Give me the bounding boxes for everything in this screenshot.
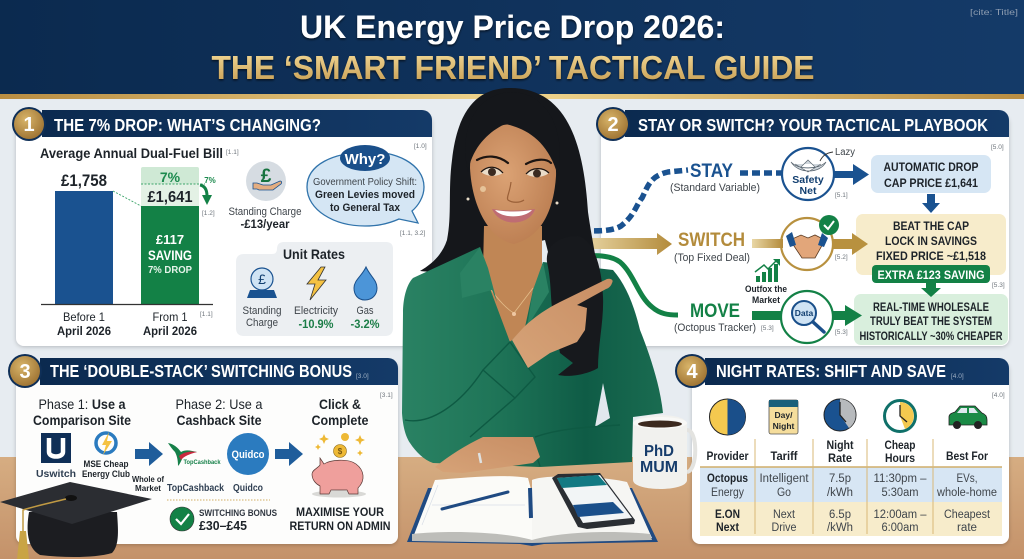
bar chart: annual bill [41,167,216,338]
smile [492,209,535,223]
box: real-time wholesale: REAL-TIME WHOLESALE [873,302,989,314]
table: night tariffs: E.ON [715,509,740,521]
unit rate labels: Charge [246,317,278,329]
cheek highlight and earrings [466,186,558,204]
icon: market chart [755,259,780,282]
neck and chest [483,226,542,342]
phase 2 heading: Cashback Site [176,412,262,428]
citations panel 2: [5.0] [991,144,1004,151]
pointing hand [512,279,613,368]
bar chart: annual bill: £1,641 [148,189,193,206]
icon: hand holding pound: £ [261,166,272,187]
icon: safety net [782,148,834,200]
stay label [670,161,760,194]
stay label: STAY [690,161,733,182]
table: night tariffs: 6:00am [882,522,918,534]
table: night tariffs: Next [773,509,796,521]
callout: why: Why? [345,151,385,168]
citation: title: [cite: Title] [970,8,1018,17]
citations panel 2: [5.1] [835,192,848,199]
table: night tariffs: Provider [706,451,749,463]
citations panel 1: [1.1] [226,149,239,156]
citations panel 3: [3.0] [356,373,369,380]
phase 1 heading: Phase 1: Use a [38,396,126,412]
table: night tariffs: rate [957,522,977,534]
icon: day night calendar: Day/ [775,410,793,420]
unit rate labels [242,305,380,331]
lazy note: Lazy [835,147,855,158]
citations panel 4: [4.0] [951,373,964,380]
icon: data magnifier: Data [795,308,813,318]
unit rate labels: -3.2% [350,319,380,331]
sleeve shading [405,342,620,466]
callout: why: Government Policy Shift: [313,177,417,188]
maximise message: MAXIMISE YOUR [296,507,385,519]
arrow: gold to fixed deal [832,233,868,255]
maximise message [290,507,390,533]
box: beat the cap: LOCK IN SAVINGS [885,236,977,248]
table: night tariffs: Energy [711,487,744,499]
table: night tariffs [700,439,1002,536]
logo: topcashback [167,443,224,494]
switch label: SWITCH [678,230,745,251]
icon: pound globe [247,268,277,298]
unit rates panel: Unit Rates [283,246,345,262]
citations panel 2: [5.3] [761,325,774,332]
citations panel 4 [951,373,1005,399]
icon: data magnifier [781,291,833,343]
table: night tariffs: EVs, [956,473,978,485]
arrow: data to move box [832,305,862,326]
box: beat the cap [856,214,1006,275]
table: night tariffs: Cheapest [944,509,991,521]
panel 2: playbook [596,107,1009,346]
table: night tariffs: 12:00am – [874,509,927,521]
logo: quidco: Quidco [233,483,263,494]
bar chart: annual bill: SAVING [148,247,192,263]
table: night tariffs: Go [777,487,791,499]
coffee mug: MUM [640,459,678,476]
box: automatic drop: CAP PRICE £1,641 [884,178,979,190]
switch label [674,230,750,264]
path: stay dashed [582,170,783,231]
citations panel 1: [1.1, 3.2] [400,230,425,237]
icon: day night clock [710,399,746,435]
table: night tariffs: Night [826,440,854,452]
citations panel 1: [1.0] [414,143,427,150]
title [212,9,814,86]
resting hand [435,437,540,473]
panel 2 flow [670,144,1008,345]
phase 2 heading [176,396,263,428]
icon: safety net: Safety [792,174,824,186]
badge 3 [8,354,42,388]
path: switch arrow [582,233,672,255]
icon: gas flame [354,267,377,300]
coffee mug: PhD [644,443,674,460]
graduation cap [0,482,152,559]
move label [674,301,756,334]
table: night tariffs: Tariff [770,451,798,463]
icon: piggy bank [312,433,366,498]
unit rates panel [236,242,393,336]
logo: topcashback: TopCashback [167,483,224,494]
smartphone [552,473,635,529]
phase 1 heading [33,396,131,428]
badge 2 [596,107,630,141]
box: automatic drop: AUTOMATIC DROP [884,162,979,174]
table: night tariffs: whole-home [936,487,997,499]
logo: quidco [227,433,269,494]
table: night tariffs: Intelligent [760,473,809,485]
pen on left page [442,492,508,509]
necklace [490,288,533,316]
eyebrows [477,157,551,164]
arrow: down to move box [921,283,941,297]
table: night tariffs: 5:30am [882,487,918,499]
icon: piggy bank: $ [338,447,343,456]
table: night tariffs: /kWh [827,522,853,534]
badge 4: 4 [686,361,698,383]
bar chart: annual bill: From 1 [152,310,188,324]
hair back [420,88,602,300]
citations panel 1: [1.2] [202,210,215,217]
switching bonus callout [170,507,277,533]
wall gap between torso and sleeve [595,383,610,427]
chart heading: Average Annual Dual-Fuel Bill [40,145,223,161]
move label: MOVE [690,301,740,322]
title: UK Energy Price Drop 2026: [300,9,725,45]
move label: (Octopus Tracker) [674,322,756,334]
standing charge change: Standing Charge [228,206,302,218]
box: beat the cap: FIXED PRICE ~£1,518 [876,251,987,263]
logo: MSE cheap energy club: MSE Cheap [84,459,129,470]
citations panel 3: [3.1] [380,392,393,399]
badge 4 [675,354,709,388]
arrow: down to beat the cap [922,194,940,213]
citations panel 1 [200,143,427,318]
switching bonus callout: SWITCHING BONUS [199,508,277,518]
icon: night rate dial [824,399,856,431]
citations panel 1: [1.1] [200,311,213,318]
person: smart friend pointing [402,88,663,473]
panel 4: night rates [675,354,1009,544]
phase 1 heading: Comparison Site [33,412,131,428]
table: night tariffs: Hours [885,453,915,465]
icon: lightning bolt [307,267,326,300]
unit rate labels: Gas [356,305,374,317]
bar chart: annual bill: 7% [204,176,216,185]
citations panel 2: [5.3] [835,329,848,336]
green connector shaft [752,311,783,320]
table: night tariffs: Next [716,522,739,534]
icon: cheap hours clock [884,400,916,432]
panel 4 heading: NIGHT RATES: SHIFT AND SAVE [716,361,946,381]
panel 3: switching bonus [8,354,398,544]
whole of market note [132,475,164,493]
table: night tariffs: Best For [946,451,988,463]
pill: extra saving: EXTRA £123 SAVING [878,270,985,282]
bar chart: annual bill: April 2026 [143,324,197,338]
open notebook [407,476,658,546]
unit rate labels: -10.9% [298,319,334,331]
arrow: stay to automatic drop [833,164,869,185]
badge 2: 2 [607,114,619,136]
icon: hand holding pound [246,161,286,201]
unit rate labels: Standing [242,305,282,317]
logo: quidco: Quidco [232,449,265,461]
table: night tariffs: Octopus [707,473,748,485]
badge 3: 3 [19,361,31,383]
outfox note: Outfox the [745,284,787,294]
pill: extra saving [872,265,990,283]
box: automatic drop [871,155,991,193]
stay label: (Standard Variable) [670,182,760,194]
citations panel 2: [5.3] [992,282,1005,289]
icon: car [949,406,987,429]
callout: why: to General Tax [330,202,401,214]
flow paths behind the person [580,170,783,315]
bar chart: annual bill: April 2026 [57,324,111,338]
bar chart: annual bill: £1,758 [61,171,107,190]
icon: day night calendar [769,400,798,434]
outfox note [745,284,787,305]
logo: topcashback: TopCashback [184,459,221,466]
lazy note [820,147,855,161]
outfox note: Market [752,295,780,305]
badge 1: 1 [23,114,35,136]
step 3 heading: Complete [312,412,369,428]
step 3 heading [312,396,369,428]
table: night tariffs: Drive [772,522,796,534]
face [470,124,556,244]
citations panel 4: [4.0] [992,392,1005,399]
table: night tariffs: 6.5p [829,509,851,521]
logo: uswitch: Uswitch [36,468,76,480]
whole of market note: Whole of [132,475,164,484]
hairline [465,92,560,176]
callout: why [307,145,424,226]
maximise message: RETURN ON ADMIN [290,521,390,533]
citations panel 2: [5.2] [835,254,848,261]
panel 1 heading: THE 7% DROP: WHAT’S CHANGING? [54,115,321,135]
badge 1 [12,107,46,141]
collar [460,247,549,327]
path: move [580,256,678,315]
box: real-time wholesale: TRULY BEAT THE SYSTEM [870,316,992,328]
bar chart: annual bill: Before 1 [63,310,105,324]
callout: why: Green Levies moved [315,189,415,201]
gold connector shaft [752,239,783,248]
nose [507,182,524,202]
unit rate labels: Electricity [294,305,338,317]
table: night tariffs: /kWh [827,487,853,499]
bar chart: annual bill: 7% DROP [148,264,192,276]
bar chart: annual bill: 7% [160,169,181,185]
coffee mug [633,415,695,489]
bar chart: annual bill: £117 [156,232,184,247]
citations panel 1: [1.1, 1.2, 1.3] [349,248,390,255]
citations panel 3 [356,373,393,399]
icon: handshake [781,215,839,270]
citations panel 2 [761,144,1005,336]
table: night tariffs: Cheap [884,440,916,452]
shirt body and arms [402,247,663,467]
hair strands over the shirt [547,236,603,376]
table: night tariffs: 11:30pm – [874,473,927,485]
pen in the gutter [530,488,531,518]
standing charge change: -£13/year [240,219,290,231]
step 3 heading: Click & [319,396,361,412]
arrow: phase 2 to complete [275,442,303,466]
logo: uswitch [36,433,76,480]
header banner [0,0,1024,99]
logo: MSE cheap energy club [82,432,130,480]
icon: day night calendar: Night [773,421,795,431]
dotted divider [167,499,270,501]
table: night tariffs: Rate [828,453,852,465]
title: THE ‘SMART FRIEND’ TACTICAL GUIDE [212,49,814,86]
arrow: phase 1 to phase 2 [135,442,163,466]
switching bonus callout: £30–£45 [199,519,247,533]
table: night tariffs: 7.5p [829,473,851,485]
phase 2 heading: Phase 2: Use a [176,396,263,412]
icon: pound globe: £ [258,271,266,287]
whole of market note: Market [135,484,161,493]
eyes [481,167,549,178]
icon: safety net: Net [800,185,817,197]
switch label: (Top Fixed Deal) [674,252,750,264]
standing charge change [228,206,302,231]
box: beat the cap: BEAT THE CAP [893,221,969,233]
box: real-time wholesale [854,294,1008,345]
panel 3 heading: THE ‘DOUBLE-STACK’ SWITCHING BONUS [50,361,352,381]
logo: MSE cheap energy club: Energy Club [82,469,130,480]
